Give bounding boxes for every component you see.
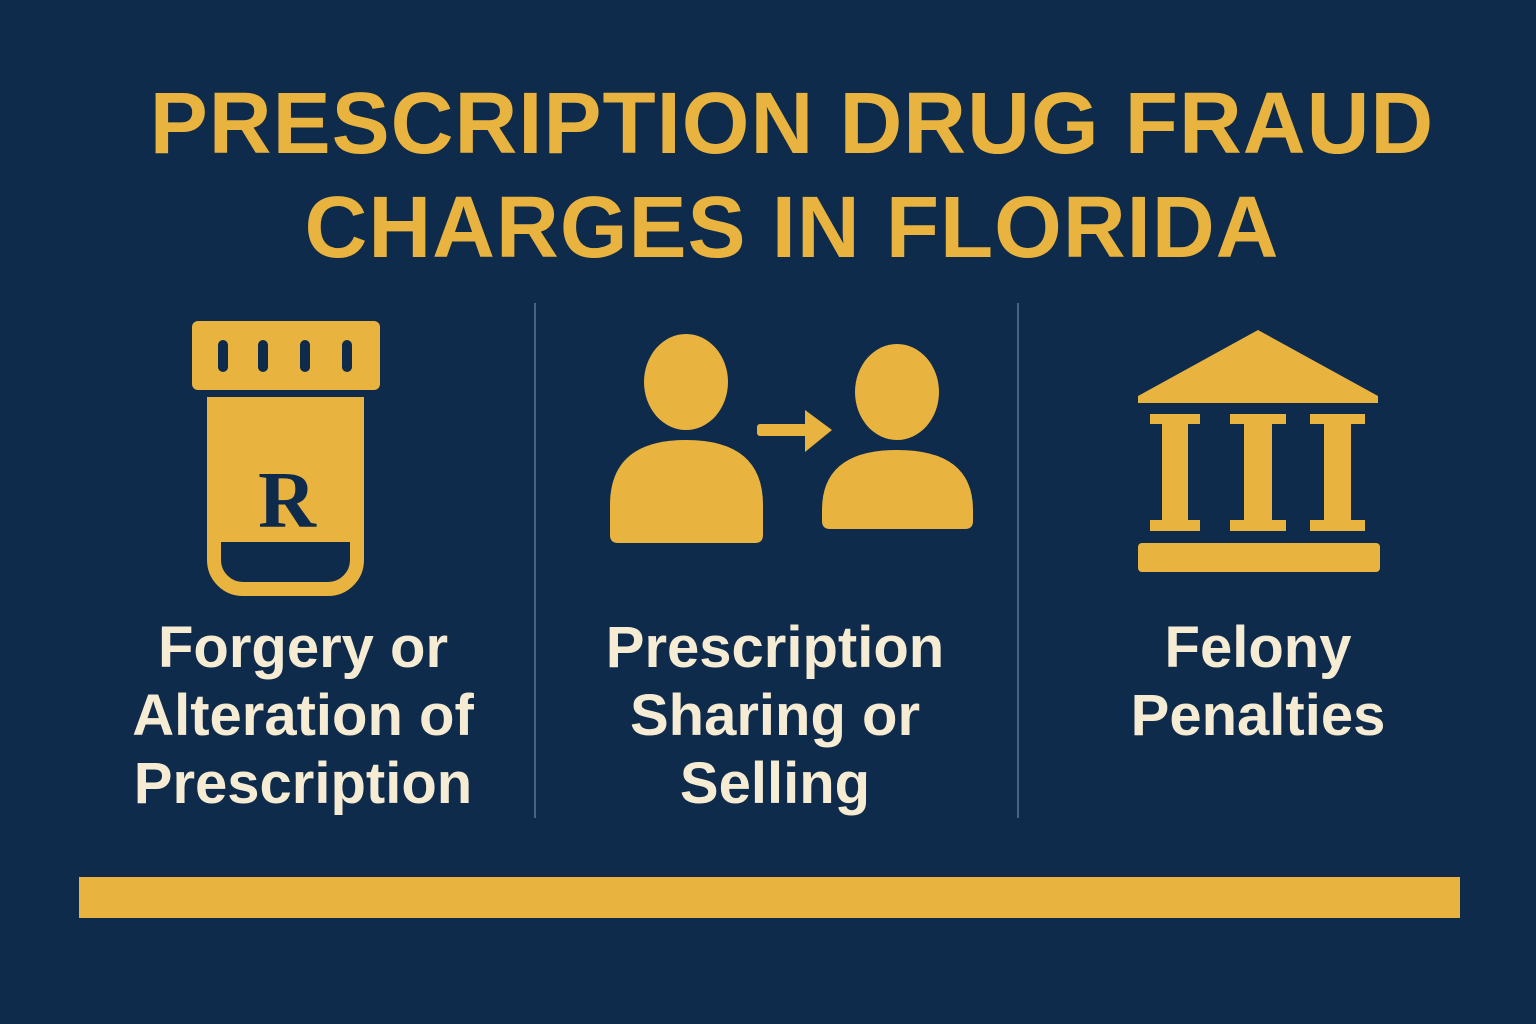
title: CHARGES IN FLORIDA (304, 179, 1280, 276)
label: forgery: Forgery or (158, 615, 448, 680)
label: forgery (132, 615, 474, 816)
label: forgery: Alteration of (132, 683, 474, 748)
label: felony (1131, 615, 1385, 748)
label: sharing: Sharing or (630, 683, 920, 748)
label: felony: Felony (1165, 615, 1351, 680)
title (150, 75, 1434, 276)
title: PRESCRIPTION DRUG FRAUD (150, 75, 1434, 172)
label: sharing (606, 615, 944, 816)
label: forgery: Prescription (134, 751, 472, 816)
bottom bar (79, 877, 1460, 918)
label: felony: Penalties (1131, 683, 1385, 748)
icon: prescription bottle: R (258, 457, 317, 545)
label: sharing: Selling (680, 751, 870, 816)
label: sharing: Prescription (606, 615, 944, 680)
